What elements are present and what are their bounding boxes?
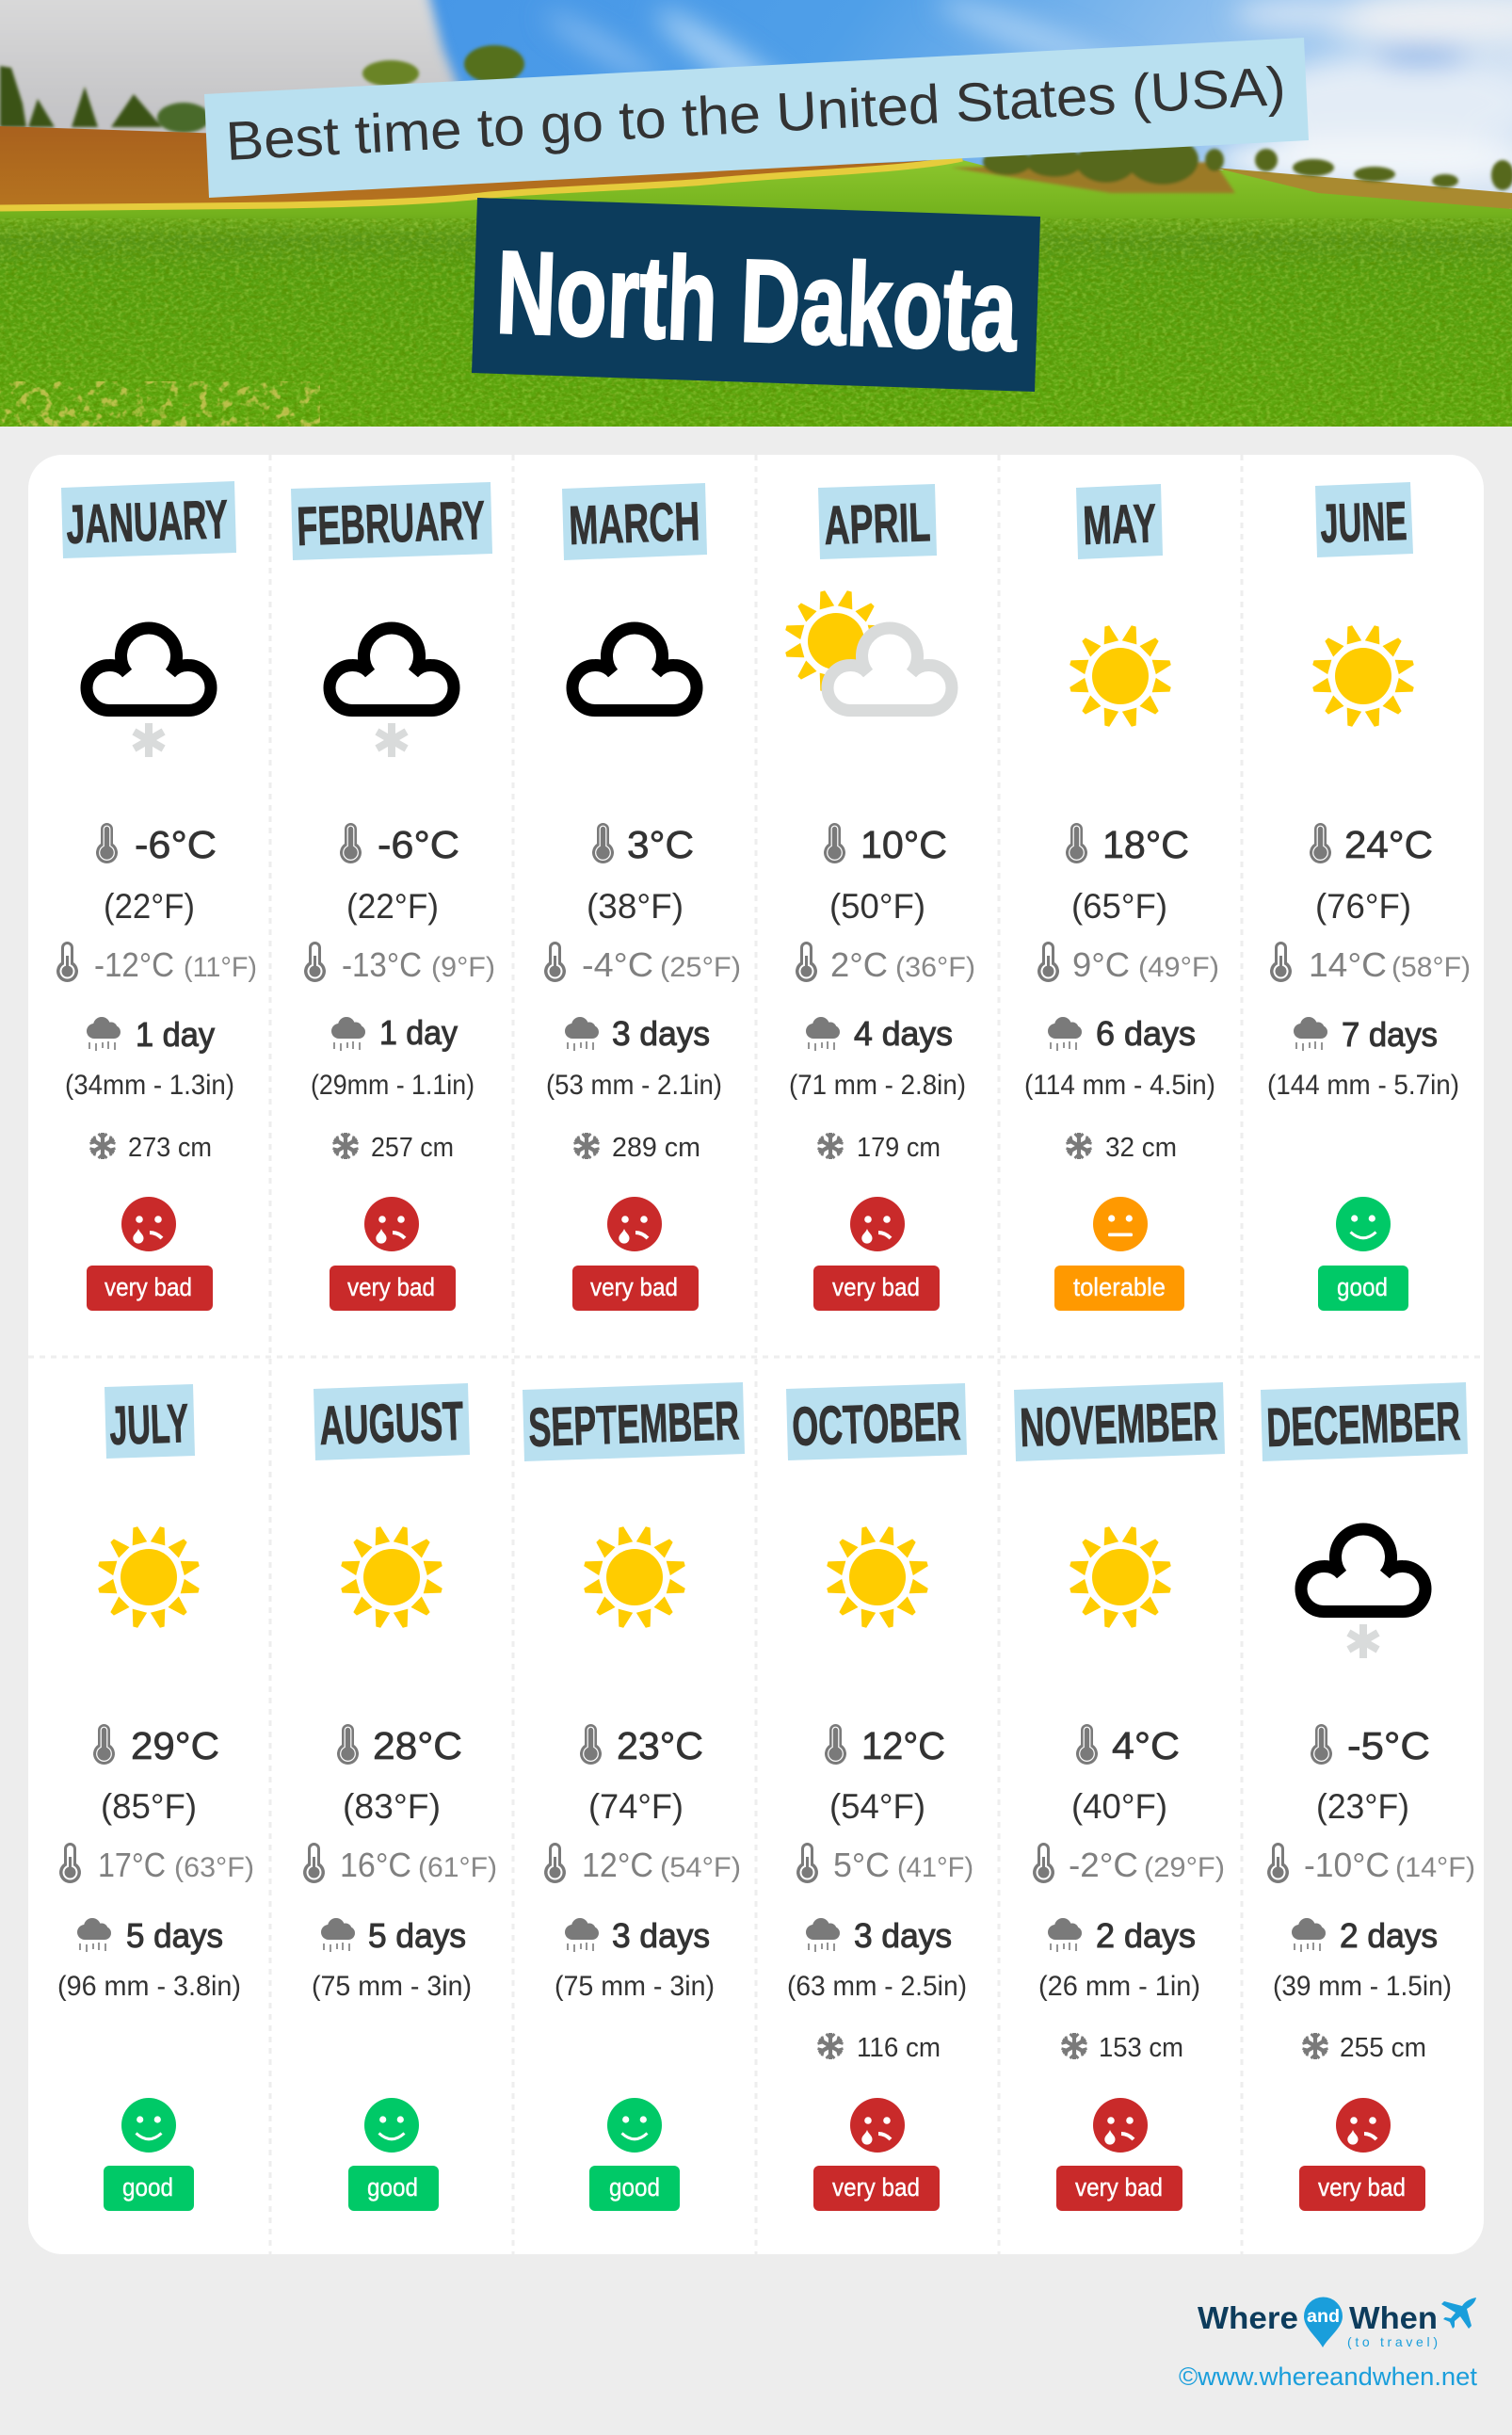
average low temperature xyxy=(796,942,975,984)
rating: very bad xyxy=(1056,2098,1182,2211)
average low temperature: (54°F) xyxy=(660,1852,741,1883)
rainfall: 1 day xyxy=(136,1015,215,1054)
rating: good: good xyxy=(1337,1273,1388,1301)
rating: very bad xyxy=(813,1197,940,1311)
rainfall: 1 day xyxy=(379,1013,458,1052)
rainfall xyxy=(65,1015,234,1101)
icon: sun xyxy=(1069,1525,1172,1629)
average high temperature: -5°C xyxy=(1347,1724,1430,1767)
average high temperature: (76°F) xyxy=(1315,887,1411,926)
rating: good xyxy=(348,2098,439,2211)
panel: January xyxy=(56,481,257,1311)
snowfall xyxy=(1302,2033,1426,2063)
month label: May xyxy=(1076,484,1163,559)
icon: sun xyxy=(1311,624,1415,728)
average high temperature: (38°F) xyxy=(587,887,684,926)
month label: September xyxy=(523,1382,745,1461)
rainfall: (26 mm - 1in) xyxy=(1038,1971,1200,2002)
average low temperature xyxy=(544,1843,741,1884)
snowfall: 273 cm xyxy=(128,1133,212,1163)
rainfall: (75 mm - 3in) xyxy=(555,1971,715,2002)
rainfall xyxy=(787,1916,967,2002)
month label: June: JUNE xyxy=(1319,491,1407,555)
rating: good: good xyxy=(609,2173,660,2201)
average low temperature: 17°C xyxy=(98,1846,166,1884)
month label: January: JANUARY xyxy=(65,489,229,556)
panel: September xyxy=(523,1382,745,2211)
rating: very bad: very bad xyxy=(1075,2173,1163,2201)
rating: good xyxy=(589,2098,680,2211)
snowfall: 257 cm xyxy=(371,1133,454,1163)
icon: cloud with snow xyxy=(330,628,454,757)
average high temperature: 18°C xyxy=(1102,823,1189,866)
logo: Where and When (to travel): Where xyxy=(1198,2300,1298,2335)
rating: tolerable: tolerable xyxy=(1073,1273,1166,1301)
icon: cloud xyxy=(572,628,697,710)
rainfall: (63 mm - 2.5in) xyxy=(787,1971,967,2002)
rainfall: (114 mm - 4.5in) xyxy=(1024,1070,1215,1101)
rating: very bad xyxy=(572,1197,699,1311)
panel: April xyxy=(784,484,975,1311)
average high temperature xyxy=(96,823,217,926)
snowfall: 255 cm xyxy=(1340,2033,1426,2063)
average high temperature: 10°C xyxy=(861,823,947,866)
average high temperature: (23°F) xyxy=(1316,1787,1409,1826)
rating: very bad: very bad xyxy=(832,2173,920,2201)
month label: June xyxy=(1315,482,1413,557)
snowfall: 116 cm xyxy=(857,2033,941,2063)
average high temperature xyxy=(825,1724,945,1826)
rainfall: 3 days xyxy=(854,1916,952,1955)
logo: Where and When (to travel): When xyxy=(1349,2300,1438,2335)
snowfall xyxy=(332,1133,454,1163)
snowfall: 153 cm xyxy=(1099,2033,1183,2063)
snowfall xyxy=(573,1133,700,1163)
average low temperature: -10°C xyxy=(1304,1846,1390,1884)
average low temperature: (36°F) xyxy=(895,952,975,983)
rating: very bad xyxy=(813,2098,940,2211)
snowfall xyxy=(817,2033,941,2063)
month label: August xyxy=(314,1383,470,1460)
rainfall: 4 days xyxy=(854,1014,953,1053)
rating: very bad: very bad xyxy=(1318,2173,1406,2201)
logo: Where and When (to travel) xyxy=(1198,2297,1476,2349)
rating: very bad: very bad xyxy=(347,1273,435,1301)
panel: August xyxy=(303,1383,497,2211)
average high temperature: (22°F) xyxy=(104,887,195,926)
average high temperature: (85°F) xyxy=(101,1787,197,1826)
average high temperature: -6°C xyxy=(378,823,459,866)
rainfall xyxy=(1024,1014,1215,1101)
banner: Best time to go to the United States (USA): Best time to go to the United States (USA) xyxy=(224,56,1287,172)
average low temperature xyxy=(59,1843,254,1884)
average high temperature: (50°F) xyxy=(829,887,925,926)
snowfall xyxy=(1061,2033,1183,2063)
average high temperature xyxy=(587,823,694,926)
average high temperature: 12°C xyxy=(861,1724,945,1767)
snowfall xyxy=(817,1133,941,1163)
snowfall xyxy=(1066,1133,1177,1163)
rainfall xyxy=(57,1916,241,2002)
average high temperature xyxy=(337,1724,462,1826)
average low temperature xyxy=(304,942,495,984)
average high temperature xyxy=(580,1724,703,1826)
banner: North Dakota xyxy=(472,198,1040,392)
average high temperature xyxy=(1311,1724,1430,1826)
average low temperature: (49°F) xyxy=(1138,952,1219,983)
average low temperature: (25°F) xyxy=(660,952,741,983)
rainfall: (39 mm - 1.5in) xyxy=(1273,1971,1452,2002)
month label: February xyxy=(291,482,492,560)
average low temperature: -4°C xyxy=(582,945,653,984)
average high temperature xyxy=(93,1724,219,1826)
month label: March: MARCH xyxy=(568,491,700,556)
average high temperature xyxy=(1071,1724,1180,1826)
average low temperature: 9°C xyxy=(1072,945,1130,984)
rainfall: (53 mm - 2.1in) xyxy=(546,1070,722,1101)
average low temperature: 2°C xyxy=(830,945,888,984)
average low temperature: (41°F) xyxy=(897,1852,973,1883)
banner: Best time to go to the United States (USA) xyxy=(204,38,1309,198)
average high temperature: 3°C xyxy=(627,823,694,866)
rating: good xyxy=(104,2098,194,2211)
rainfall: 5 days xyxy=(368,1916,466,1955)
panel: February xyxy=(291,482,495,1311)
month label: March xyxy=(562,483,707,560)
snowfall: 179 cm xyxy=(857,1133,941,1163)
average low temperature xyxy=(1270,942,1471,984)
average low temperature: -2°C xyxy=(1069,1846,1138,1884)
panel: November xyxy=(1014,1382,1225,2211)
rating: very bad xyxy=(1299,2098,1425,2211)
rainfall xyxy=(546,1014,722,1101)
average low temperature xyxy=(544,942,741,984)
average high temperature: (40°F) xyxy=(1071,1787,1167,1826)
average low temperature: -13°C xyxy=(342,945,422,984)
average high temperature: 4°C xyxy=(1112,1724,1180,1767)
average low temperature: 12°C xyxy=(582,1846,653,1884)
average low temperature: 5°C xyxy=(833,1846,890,1884)
snowfall: 289 cm xyxy=(612,1133,700,1163)
month label: July xyxy=(105,1384,195,1459)
white calendar panel xyxy=(28,455,1484,2254)
average high temperature: 24°C xyxy=(1344,823,1433,866)
average high temperature xyxy=(1066,823,1189,926)
rainfall: 3 days xyxy=(612,1916,710,1955)
average low temperature: (29°F) xyxy=(1144,1852,1225,1883)
rainfall: (75 mm - 3in) xyxy=(312,1971,472,2002)
rainfall: 6 days xyxy=(1096,1014,1196,1053)
month label: November xyxy=(1014,1382,1225,1461)
rating: good: good xyxy=(367,2173,418,2201)
average low temperature xyxy=(303,1843,497,1884)
rating: very bad: very bad xyxy=(105,1273,192,1301)
average high temperature: 28°C xyxy=(373,1724,462,1767)
header landscape photo xyxy=(0,0,1512,427)
rainfall xyxy=(1267,1015,1459,1101)
average low temperature xyxy=(796,1843,973,1884)
average low temperature xyxy=(1033,1843,1225,1884)
rainfall xyxy=(1273,1916,1452,2002)
rainfall: 2 days xyxy=(1096,1916,1196,1955)
rating: very bad: very bad xyxy=(590,1273,678,1301)
panel: June xyxy=(1267,482,1471,1311)
rating: very bad: very bad xyxy=(832,1273,920,1301)
average low temperature xyxy=(56,942,257,984)
average low temperature: (11°F) xyxy=(184,952,257,983)
month label: September: SEPTEMBER xyxy=(527,1390,740,1459)
banner: North Dakota: North Dakota xyxy=(494,227,1021,376)
panel: May xyxy=(1024,484,1219,1311)
rainfall: (71 mm - 2.8in) xyxy=(789,1070,966,1101)
average high temperature xyxy=(340,823,459,926)
average high temperature: 29°C xyxy=(131,1724,219,1767)
rating: good xyxy=(1318,1197,1408,1311)
month label: February: FEBRUARY xyxy=(296,490,486,557)
month label: May: MAY xyxy=(1082,492,1157,556)
month label: July: JULY xyxy=(108,1393,189,1457)
average low temperature: 16°C xyxy=(340,1846,411,1884)
rainfall: 2 days xyxy=(1340,1916,1438,1955)
average high temperature xyxy=(824,823,947,926)
rating: very bad xyxy=(87,1197,213,1311)
icon: sun xyxy=(1069,624,1172,728)
month label: October: OCTOBER xyxy=(791,1391,961,1458)
icon: cloud with snow xyxy=(87,628,211,757)
rainfall xyxy=(1038,1916,1200,2002)
month label: April xyxy=(818,484,937,559)
average high temperature xyxy=(1310,823,1433,926)
rainfall xyxy=(312,1916,472,2002)
average high temperature: (22°F) xyxy=(346,887,439,926)
snowfall xyxy=(89,1133,212,1163)
icon: sun xyxy=(97,1525,201,1629)
icon: cloud with snow xyxy=(1301,1529,1425,1658)
logo: Where and When (to travel): and xyxy=(1307,2307,1340,2327)
average low temperature: -12°C xyxy=(94,945,174,984)
rainfall: 7 days xyxy=(1342,1015,1438,1054)
rainfall: 5 days xyxy=(126,1916,223,1955)
rainfall: (144 mm - 5.7in) xyxy=(1267,1070,1459,1101)
panel: July xyxy=(57,1384,254,2211)
average low temperature xyxy=(1037,942,1219,984)
rainfall xyxy=(311,1013,475,1101)
month label: November: NOVEMBER xyxy=(1019,1391,1218,1459)
rainfall xyxy=(789,1014,966,1101)
month label: January xyxy=(61,481,236,558)
average low temperature: (63°F) xyxy=(174,1852,254,1883)
average high temperature: (65°F) xyxy=(1071,887,1167,926)
average high temperature: 23°C xyxy=(617,1724,703,1767)
icon: sun xyxy=(583,1525,686,1629)
rainfall: (34mm - 1.3in) xyxy=(65,1070,234,1101)
icon: sun xyxy=(826,1525,929,1629)
rainfall: (29mm - 1.1in) xyxy=(311,1070,475,1101)
average high temperature: (54°F) xyxy=(829,1787,925,1826)
average low temperature: (61°F) xyxy=(418,1852,497,1883)
icon: sun xyxy=(340,1525,443,1629)
average low temperature xyxy=(1267,1843,1475,1884)
panel: March xyxy=(544,483,741,1311)
icon: sun behind cloud xyxy=(784,589,952,710)
rating: very bad xyxy=(330,1197,456,1311)
panel: October xyxy=(786,1383,973,2211)
average low temperature: (9°F) xyxy=(431,952,495,983)
rating: tolerable xyxy=(1054,1197,1184,1311)
average high temperature: -6°C xyxy=(135,823,217,866)
average low temperature: 14°C xyxy=(1309,945,1387,984)
month label: October xyxy=(786,1383,967,1460)
rainfall xyxy=(555,1916,715,2002)
average high temperature: (74°F) xyxy=(588,1787,684,1826)
month label: August: AUGUST xyxy=(318,1391,464,1457)
website credit: ©www.whereandwhen.net xyxy=(1179,2362,1477,2391)
month label: April: APRIL xyxy=(823,492,931,556)
average low temperature: (58°F) xyxy=(1391,952,1471,983)
average high temperature: (83°F) xyxy=(343,1787,441,1826)
logo: Where and When (to travel): (to travel) xyxy=(1347,2334,1438,2349)
panel: December xyxy=(1261,1382,1475,2211)
rainfall: (96 mm - 3.8in) xyxy=(57,1971,241,2002)
rainfall: 3 days xyxy=(612,1014,710,1053)
average low temperature: (14°F) xyxy=(1395,1852,1475,1883)
snowfall: 32 cm xyxy=(1105,1133,1177,1163)
rating: good: good xyxy=(122,2173,173,2201)
